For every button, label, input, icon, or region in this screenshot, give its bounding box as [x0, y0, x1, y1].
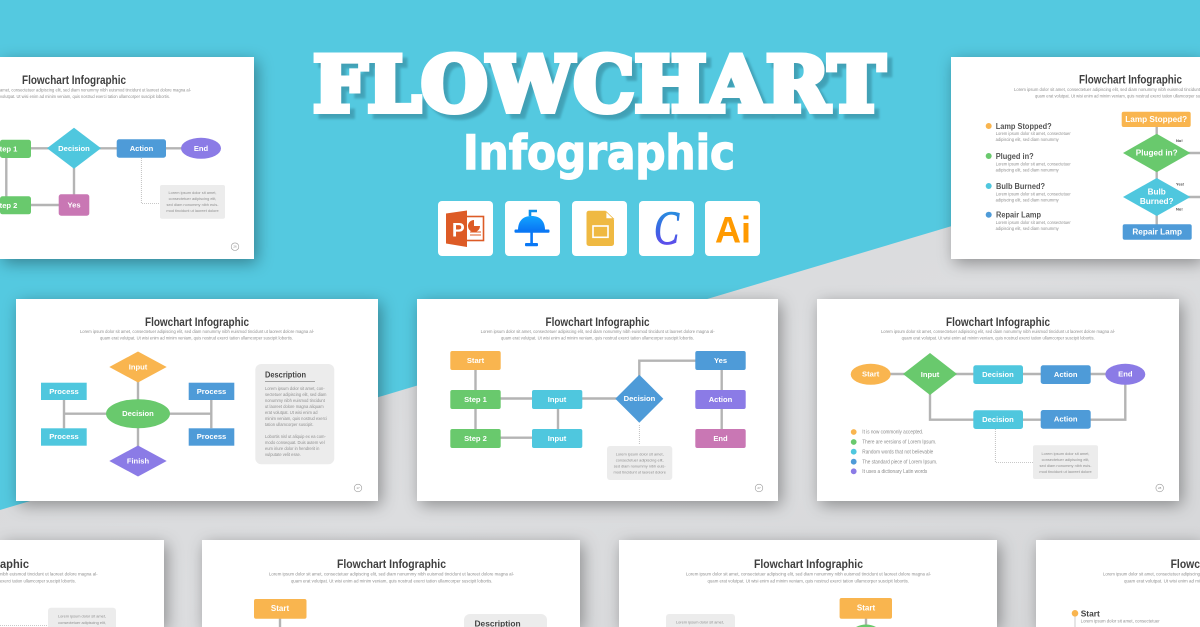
legend list: Random words that not believable — [862, 449, 933, 455]
slide intro text: Lorem ipsum dolor sit amet, consectetuer adipiscing elit, sed diam nonummy nibh euismod tincidunt ut laoreet dolore magna al- — [269, 572, 515, 576]
slide intro text: nibh euismod tincidunt ut laoreet dolore magna al- — [0, 572, 98, 576]
slide heading: Flowchart Infographic — [546, 317, 650, 329]
slide intro text: Lorem ipsum dolor sit amet, consectetuer adipiscing elit, sed diam nonummy nibh euismod tincidunt — [1014, 87, 1200, 92]
legend list: It uses a dictionary Latin words — [862, 469, 928, 475]
icon: PowerPoint — [438, 201, 493, 256]
description panel: Description — [265, 371, 306, 380]
node: yes: Yes — [67, 200, 81, 210]
list item: repair lamp: adipiscing elit, sed diam nonummy — [996, 226, 1060, 231]
node: lamp stopped: Lamp Stopped? — [1125, 115, 1187, 124]
icon: Canva — [639, 201, 694, 256]
slide heading: Flowchart Infographic — [754, 559, 864, 571]
slide intro text: quam erat volutpat. Ut wisi enim ad minim veniam, quis nostrud exerci tation ullamcorper suscipit lobortis. — [708, 578, 909, 584]
description panel: nonummy nibh euismod tincidunt — [265, 398, 326, 403]
page number — [354, 484, 362, 492]
slide intro text: Lorem ipsum dolor sit amet, consectetuer adipiscing — [1103, 572, 1200, 576]
node: end — [1105, 364, 1145, 385]
note box — [48, 608, 116, 627]
note box: consectetuer adipiscing elit, — [1042, 457, 1089, 462]
slide intro text — [481, 329, 715, 340]
node: decision — [615, 375, 663, 423]
page number — [755, 484, 763, 492]
node: decision — [106, 399, 170, 428]
icon: Illustrator — [705, 201, 760, 256]
icon: Canva: C — [654, 202, 680, 255]
slide: top right lamp flowchart — [951, 57, 1200, 259]
page number: 28 — [1158, 486, 1162, 490]
list item: lamp stopped: adipiscing elit, sed diam nonummy — [996, 137, 1060, 142]
icon: Illustrator: Ai — [715, 210, 751, 251]
note box: mod tincidunt ut laoreet dolore — [614, 470, 666, 474]
background: grey marble diagonal — [0, 152, 1200, 627]
node: step 1 — [450, 390, 501, 409]
slide: bottom row far left — [0, 540, 164, 627]
description panel: modo consequat. Duis autem vel — [265, 440, 325, 445]
description panel: Lobortis nisl ut aliquip ex ea com- — [265, 434, 326, 439]
slide: bottom row far right — [1036, 540, 1200, 627]
node: process top left: Process — [49, 387, 79, 396]
list item: start: Lorem ipsum dolor sit amet, consectetuer — [1081, 618, 1160, 624]
node: yes — [59, 194, 89, 216]
slide intro text — [686, 572, 932, 584]
slide heading: Flowchart Infographic — [145, 317, 250, 329]
node: start — [840, 598, 892, 619]
slide intro text: Lorem ipsum dolor sit amet, consectetuer adipiscing elit, sed diam nonummy nibh euismod tincidunt ut laoreet dolore magna al- — [481, 329, 715, 334]
node: action lower: Action — [1054, 414, 1078, 424]
list item: start — [1072, 608, 1160, 627]
description panel: minim veniam, quis nostrud exerci — [265, 416, 327, 421]
node: action upper — [1041, 365, 1091, 384]
dotted leader — [0, 625, 48, 627]
node: pluged in — [1123, 134, 1190, 172]
description panel: ut laoreet dolore magna aliquam — [265, 404, 324, 409]
slide intro text: quam erat volutpat. Ut wisi enim ad minim veniam, quis nostrud exerci tation ullamcorper suscipit lobortis. — [291, 578, 492, 584]
page number — [1156, 484, 1163, 492]
node: input: Input — [921, 370, 940, 379]
node: process top right — [189, 383, 234, 400]
slide intro text — [0, 88, 192, 99]
node: finish — [109, 446, 167, 476]
description panel: tation ullamcorper suscipit. — [265, 422, 313, 427]
note box: Lorem ipsum dolor sit amet, — [168, 190, 217, 195]
slide: steps and decision — [417, 299, 778, 501]
note box: mod tincidunt ut laoreet dolore — [1039, 469, 1092, 474]
node: input upper — [532, 390, 582, 409]
node: action upper: Action — [1054, 370, 1078, 379]
node: step 2: Step 2 — [464, 434, 487, 443]
node: finish: Finish — [127, 456, 150, 466]
connector lines — [476, 361, 722, 438]
list item: repair lamp — [986, 210, 1071, 231]
slide: bottom row centre right — [619, 540, 997, 627]
note box: Lorem ipsum dolor sit amet, — [676, 620, 724, 624]
node: end: End — [713, 434, 728, 443]
branch labels: Yes! — [1176, 182, 1184, 186]
node: process bottom left: Process — [49, 432, 79, 441]
note box — [666, 614, 735, 627]
slide intro text: quam erat volutpat. Ut wisi enim ad minim veniam, quis nostrud exerci tation ullamcorper suscipit lobortis. — [501, 336, 694, 340]
node: end: End — [1118, 370, 1133, 378]
node: input lower — [532, 429, 582, 448]
main title: FLOWCHART: FLOWCHART — [313, 40, 885, 129]
slide heading: Flowchart Infographic — [1079, 74, 1183, 86]
branch labels: No! — [1176, 206, 1183, 212]
node: repair lamp — [1123, 224, 1192, 240]
node: start: Start — [467, 356, 485, 365]
description panel: erat volutpat. Ut wisi enim ad — [265, 410, 318, 415]
branch labels: No! — [1176, 138, 1183, 143]
list item: lamp stopped — [986, 121, 1071, 142]
node: yes: Yes — [714, 356, 727, 365]
slide: top left flowchart — [0, 57, 254, 259]
connector lines — [870, 374, 1125, 420]
branch labels — [1176, 138, 1184, 212]
description panel — [255, 364, 334, 464]
dotted leader — [995, 429, 1033, 462]
slide intro text: quam erat volutpat. Ut wisi enim ad minim veniam, quis nostrud exerci tation ullamcorper suscipit lobortis. — [902, 336, 1095, 340]
node: step 1: Step 1 — [464, 395, 488, 404]
node: step 2 — [450, 429, 501, 448]
node: lamp stopped — [1122, 112, 1191, 127]
node: end: End — [194, 144, 209, 153]
slide intro text: quam erat volutpat. Ut wisi enim ad mi — [1124, 578, 1200, 584]
node: repair lamp: Repair Lamp — [1132, 228, 1182, 236]
note box: consectetuer adipiscing elit, — [58, 620, 106, 625]
page number — [231, 243, 239, 250]
note box: mod tincidunt ut laoreet dolore — [166, 208, 219, 213]
legend list: The standard piece of Lorem Ipsum. — [862, 459, 937, 465]
list item: repair lamp: Repair Lamp — [996, 210, 1041, 220]
note box — [607, 446, 672, 480]
description panel: eum iriure dolor in hendrerit in — [265, 446, 320, 451]
note box: sed diam nonummy nibh euis- — [1040, 463, 1092, 468]
node: process top left — [41, 383, 87, 400]
note box: Lorem ipsum dolor sit amet, — [1041, 451, 1090, 456]
list item: pluged in: Lorem ipsum dolor sit amet, consectetuer — [996, 161, 1071, 166]
slide: process hub — [16, 299, 378, 501]
node: decision: Decision — [122, 409, 154, 418]
note box: Lorem ipsum dolor sit amet, — [616, 452, 664, 456]
node: input: Input — [129, 362, 148, 372]
description panel — [464, 614, 547, 627]
connector lines — [6, 148, 201, 205]
slide intro text: quam erat volutpat. Ut wisi enim ad minim veniam, quis nostrud exerci tation ullamcorper su — [1035, 94, 1200, 99]
node: start: Start — [857, 604, 875, 612]
slide heading: Flowchart Infographic — [22, 75, 127, 87]
slide intro text: Lorem ipsum dolor sit amet, consectetuer adipiscing elit, sed diam nonummy nibh euismod tincidunt ut laoreet dolore magna al- — [80, 329, 315, 334]
node: decision: Decision — [624, 394, 656, 403]
slide intro text: Lorem ipsum dolor sit amet, consectetuer adipiscing elit, sed diam nonummy nibh euismod tincidunt ut laoreet dolore magna al- — [686, 572, 932, 576]
node: process bottom right: Process — [197, 432, 226, 441]
icon: Keynote — [505, 201, 560, 256]
list item: repair lamp: Lorem ipsum dolor sit amet, consectetuer — [996, 220, 1071, 225]
list item: pluged in — [986, 151, 1071, 172]
node: input lower: Input — [548, 434, 567, 443]
node: start — [851, 364, 891, 385]
description panel: sectetuer adipiscing elit, sed diam — [265, 392, 327, 397]
subtitle: Infographic: Infographic — [463, 126, 735, 181]
node: bulb burned: Burned? — [1140, 197, 1174, 206]
legend list: There are versions of Lorem Ipsum. — [862, 440, 936, 446]
node: input upper: Input — [548, 395, 567, 404]
node: input — [109, 352, 167, 382]
connector line — [279, 618, 281, 627]
note box: sed diam nonummy nibh euis- — [614, 464, 666, 468]
slide: two-track flow — [817, 299, 1179, 501]
list item: lamp stopped: Lorem ipsum dolor sit amet, consectetuer — [996, 131, 1071, 136]
node: decision — [47, 128, 101, 169]
note box: sed diam nonummy nibh euis- — [167, 202, 219, 207]
node: pluged in: Pluged in? — [1136, 148, 1178, 158]
node: decision upper: Decision — [982, 370, 1014, 379]
slide intro text — [269, 572, 515, 584]
note box — [1033, 445, 1098, 479]
legend list: It is now commonly accepted. — [862, 430, 923, 436]
note box: consectetuer adipiscing elit, — [616, 458, 664, 462]
dotted leader — [638, 425, 640, 444]
node: process bottom left — [41, 428, 87, 446]
slide intro text — [1103, 572, 1200, 584]
node: action — [117, 139, 166, 158]
slide intro text: quam erat volutpat. Ut wisi enim ad minim veniam, quis nostrud exerci tation ullamcorper suscipit lobortis. — [100, 336, 293, 340]
slide intro text — [1014, 87, 1200, 99]
list item: bulb burned: Bulb Burned? — [996, 181, 1045, 191]
icon: PowerPoint: P — [452, 220, 465, 242]
connector lines — [64, 380, 211, 448]
slide intro text: exerci tation ullamcorper suscipit lobortis. — [0, 578, 76, 584]
slide intro text — [0, 572, 98, 584]
node: action — [695, 390, 746, 409]
main title: FLOWCHART: FLOWCHART — [318, 45, 890, 134]
list item: pluged in: adipiscing elit, sed diam nonummy — [996, 168, 1060, 172]
node: decision: Decision — [58, 144, 90, 153]
node: bulb burned: Bulb — [1148, 188, 1166, 196]
node: process bottom right — [189, 428, 234, 446]
node: step 1 — [0, 140, 31, 158]
node: action: Action — [709, 395, 733, 404]
node: decision lower: Decision — [982, 415, 1014, 424]
node: input — [903, 353, 957, 395]
node: decision lower — [973, 410, 1023, 429]
node: start: Start — [862, 370, 880, 378]
node: end — [695, 429, 746, 448]
list item: lamp stopped: Lamp Stopped? — [996, 121, 1052, 131]
slide intro text: amet, consectetuer adipiscing elit, sed diam nonummy nibh euismod tincidunt ut laoreet dolore magna al- — [0, 88, 192, 92]
description panel: vulputate velit esse. — [265, 452, 301, 457]
node: yes — [695, 351, 746, 370]
node: start: Start — [271, 604, 289, 613]
node: step 2 — [0, 196, 31, 214]
connector line — [865, 618, 867, 626]
node: start — [450, 351, 501, 370]
node: start — [254, 599, 306, 619]
note box: consectetuer adipiscing elit, — [169, 196, 216, 201]
slide intro text — [881, 329, 1116, 340]
page number: 26 — [233, 245, 237, 249]
slide heading: Flowchart Infographic — [946, 317, 1051, 329]
list item: bulb burned: adipiscing elit, sed diam nonummy — [996, 198, 1060, 203]
node: action: Action — [130, 144, 154, 153]
list item: bulb burned: Lorem ipsum dolor sit amet, consectetuer — [996, 192, 1071, 196]
note box: Lorem ipsum dolor sit amet, — [58, 614, 106, 618]
node: action lower — [1041, 410, 1091, 429]
slide intro text: Lorem ipsum dolor sit amet, consectetuer adipiscing elit, sed diam nonummy nibh euismod tincidunt ut laoreet dolore magna al- — [881, 329, 1116, 334]
node: bulb burned — [1123, 178, 1190, 216]
legend list — [851, 429, 937, 475]
page number: 27 — [757, 486, 761, 490]
connector lines — [1157, 127, 1200, 225]
icon: Google Slides — [572, 201, 627, 256]
slide heading: Flowchart Infographic — [337, 559, 447, 571]
list item: pluged in: Pluged in? — [996, 151, 1034, 161]
slide: bottom row centre left — [202, 540, 580, 627]
description panel: Lorem ipsum dolor sit amet, con- — [265, 386, 325, 391]
node: end — [181, 138, 221, 159]
page number: 17 — [356, 486, 360, 490]
slide intro text — [80, 329, 315, 340]
node: decision upper — [973, 365, 1023, 384]
slide intro text: volutpat. Ut wisi enim ad minim veniam, quis nostrud exerci tation ullamcorper suscipit lobortis. — [0, 94, 170, 99]
node: process top right: Process — [197, 387, 226, 396]
note box — [160, 185, 225, 219]
slide heading: aphic — [0, 559, 30, 571]
node: green top — [856, 624, 876, 627]
dotted leader — [141, 158, 160, 203]
list item: start: Start — [1081, 608, 1100, 618]
list item: bulb burned — [986, 181, 1071, 203]
